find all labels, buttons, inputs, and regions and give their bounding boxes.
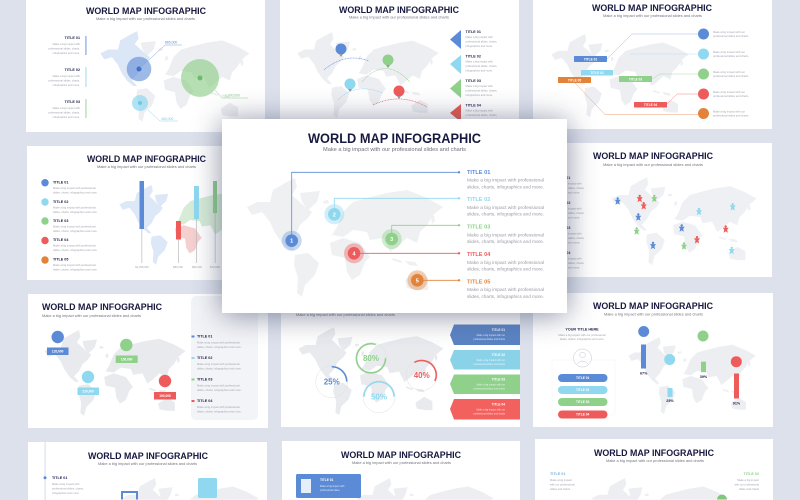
right note: TITLE 02 — [744, 472, 759, 476]
list: Make a big impact with professional — [53, 186, 96, 190]
heading: WORLD MAP INFOGRAPHIC — [339, 5, 459, 16]
list item 2: TITLE 02 — [65, 68, 80, 72]
list item 1: infographics and more. — [466, 44, 493, 48]
list item 3: Make a big impact with — [53, 106, 80, 110]
subheading: Make a big impact with our professional slides and charts — [352, 461, 451, 465]
text block 2: slides, charts, infographics and more. — [467, 212, 544, 217]
list item 1: professional slides, charts, — [466, 40, 497, 44]
world map — [247, 178, 443, 297]
tag: title 04: TITLE 04 — [644, 103, 657, 107]
data circle: green — [181, 59, 248, 98]
blue card — [296, 474, 361, 498]
list — [555, 176, 585, 270]
heading: WORLD MAP INFOGRAPHIC — [341, 450, 461, 461]
heading: WORLD MAP INFOGRAPHIC — [592, 3, 712, 14]
pills: TITLE 03 — [576, 400, 590, 404]
text block 4: Make a big impact with professional — [467, 260, 544, 265]
list item 3: infographics and more. — [53, 115, 80, 119]
ribbon: title 04: professional slides and charts — [474, 412, 506, 416]
bar: green: $70,000 — [210, 265, 220, 269]
list: TITLE 04 — [197, 399, 213, 403]
list: impact with — [568, 256, 582, 260]
list: TITLE 03 — [555, 226, 570, 230]
ribbon: title 04 — [450, 399, 520, 420]
world map — [297, 32, 439, 118]
left note: with our professional — [550, 482, 575, 486]
list item 1: Make a big impact with — [466, 35, 493, 39]
text block 1 — [467, 170, 544, 189]
text block 5: slides, charts, infographics and more. — [467, 294, 544, 299]
list: TITLE 05 — [53, 258, 68, 262]
list item 2 — [48, 67, 86, 87]
list: slides, charts, — [568, 186, 585, 190]
world map — [611, 177, 757, 265]
icon list: Make a big impact with our — [713, 110, 745, 114]
list: and more. — [568, 190, 580, 194]
tag: title 02 — [581, 70, 613, 76]
world map — [44, 330, 186, 416]
text block 5: TITLE 05 — [467, 279, 490, 285]
ribbon: title 04: Make a big impact with our — [477, 408, 505, 412]
list: slides, charts, infographics and more. — [53, 210, 98, 214]
list item 2: Make a big impact with — [53, 74, 80, 78]
marker 2 with connector: 2 — [333, 212, 336, 218]
data circle: blue: 865,000 — [165, 40, 177, 44]
heading: WORLD MAP INFOGRAPHIC — [88, 451, 208, 462]
data circle: light blue — [132, 95, 178, 121]
list: Make a big impact with professional — [197, 405, 240, 409]
list: slides, charts, — [568, 236, 585, 240]
text block 4: slides, charts, infographics and more. — [467, 266, 544, 271]
subheading: Make a big impact with our professional slides and charts — [42, 314, 141, 318]
ribbon: title 01 — [450, 324, 520, 345]
list: slides, charts, infographics and more. — [53, 248, 98, 252]
list item 2: Make a big impact with — [466, 60, 493, 64]
subheading: Make a big impact with our professional slides and charts — [96, 17, 195, 21]
subheading: Make a big impact with our professional slides and charts — [98, 462, 197, 466]
slide: bottom centre — [282, 441, 520, 500]
tag: title 01 — [574, 56, 607, 62]
slide: map pins with value tags — [28, 294, 268, 428]
list item — [52, 476, 84, 495]
text block 3: slides, charts, infographics and more. — [467, 239, 544, 244]
icon list — [698, 28, 749, 119]
list item 3: TITLE 03 — [65, 100, 80, 104]
heading: WORLD MAP INFOGRAPHIC — [42, 302, 162, 313]
marker 2 with connector — [324, 197, 460, 224]
ribbon: title 02 — [450, 350, 520, 370]
list — [41, 179, 98, 272]
icon list: professional slides and charts — [713, 94, 749, 98]
list: Make a big impact with professional — [197, 340, 240, 344]
list item 1: infographics and more. — [53, 51, 80, 55]
bar: red — [173, 221, 183, 269]
list item 1: TITLE 01 — [65, 36, 80, 40]
ring: 50%: 50% — [371, 392, 387, 402]
bar: green — [210, 181, 220, 269]
icon list: professional slides and charts — [713, 54, 749, 58]
list item 1: Make a big impact with — [53, 42, 80, 46]
blue card: TITLE 01 — [320, 478, 334, 482]
list: impact with — [568, 206, 582, 210]
marker: 39% — [698, 330, 708, 379]
list item 2: infographics and more. — [466, 68, 493, 72]
list: Make a big impact with professional — [53, 263, 96, 267]
text block 2: Make a big impact with professional — [467, 205, 544, 210]
list: impact with — [568, 232, 582, 236]
world map — [591, 478, 729, 500]
side title: Make a big impact with our professional — [558, 333, 606, 337]
tag: title 05 — [558, 77, 591, 83]
pin: red — [154, 375, 176, 400]
list: TITLE 04 — [53, 238, 69, 242]
centre slide shadow — [222, 121, 567, 315]
blue card: Make a big impact with — [320, 485, 345, 488]
slide: people markers map — [520, 143, 772, 277]
slide: pins with bars and pills — [533, 293, 773, 427]
list item 1: TITLE 01 — [466, 30, 481, 34]
ring: 80%: 80% — [363, 354, 379, 363]
heading: WORLD MAP INFOGRAPHIC — [594, 448, 714, 459]
heading: WORLD MAP INFOGRAPHIC — [593, 151, 713, 162]
text block 4: TITLE 04 — [467, 252, 491, 258]
list item 3 — [450, 79, 497, 98]
list: Make a big impact with professional — [53, 206, 96, 210]
list item 2: TITLE 02 — [466, 54, 481, 58]
bar: blue — [135, 181, 149, 269]
left note: TITLE 01 — [550, 472, 565, 476]
text block 3 — [467, 224, 544, 244]
list item 2 — [450, 54, 497, 74]
list: TITLE 01 — [197, 334, 212, 338]
pin: red: 190,000 — [159, 394, 171, 398]
world map — [101, 31, 249, 122]
marker 5 with connector: 5 — [416, 278, 419, 284]
list: slides, charts, infographics and more. — [197, 388, 242, 392]
icon list: Make a big impact with our — [713, 90, 745, 94]
list item 4: TITLE 04 — [466, 104, 482, 108]
ribbon: title 01: professional slides and charts — [474, 338, 506, 341]
text block 5 — [467, 279, 544, 299]
world map — [298, 327, 444, 415]
text block 1: slides, charts, infographics and more. — [467, 184, 544, 189]
list: slides, charts, — [568, 261, 585, 265]
thin frame — [552, 360, 615, 415]
bar: light blue: $90,000 — [192, 265, 202, 269]
slide: connector labels map — [533, 0, 772, 129]
list: slides, charts, infographics and more. — [197, 366, 242, 370]
world map — [356, 478, 494, 500]
list item 4: professional slides, charts, — [466, 113, 497, 117]
people markers — [615, 195, 736, 254]
ribbon: title 02: TITLE 02 — [492, 353, 505, 357]
side title — [558, 328, 606, 341]
left note — [550, 472, 575, 491]
list: Make a big impact with professional — [197, 362, 240, 366]
heading: WORLD MAP INFOGRAPHIC — [593, 301, 713, 312]
icon list: Make a big impact with our — [713, 50, 745, 54]
ring: 25% — [316, 366, 348, 398]
connectors — [575, 34, 698, 114]
subheading: Make a big impact with our professional slides and charts — [296, 313, 395, 317]
marker 4 with connector — [344, 243, 460, 263]
ribbon: title 03 — [450, 374, 520, 394]
list item: professional slides, charts, — [52, 486, 84, 490]
list: slides, charts, infographics and more. — [53, 268, 98, 272]
ribbon: title 03: Make a big impact with our — [477, 384, 505, 386]
list: Make a big impact with professional — [53, 224, 96, 228]
list item 2: professional slides, charts, — [48, 78, 80, 82]
marker: 39%: 39% — [700, 375, 708, 379]
marker 5 with connector — [407, 270, 460, 290]
ring: 40% — [402, 355, 442, 395]
heading: WORLD MAP INFOGRAPHIC — [308, 131, 481, 146]
data circle: green: 1,000,600 — [225, 94, 240, 98]
subheading: Make a big impact with our professional slides and charts — [604, 312, 703, 316]
blue card: professional slides — [320, 489, 340, 492]
tag: title 03 — [619, 76, 652, 82]
pin: green — [116, 339, 138, 363]
left note: Make a big impact — [550, 478, 572, 482]
slide: proportional circles map — [26, 0, 265, 132]
text block 2: TITLE 02 — [467, 197, 490, 203]
list: and more. — [568, 266, 580, 270]
icon list: Make a big impact with our — [713, 30, 745, 34]
right note: slides and charts — [739, 487, 760, 491]
pin: blue — [47, 331, 68, 355]
slide: bottom left — [28, 442, 267, 500]
ribbon: title 02: professional slides and charts — [474, 363, 506, 366]
pills — [558, 374, 608, 418]
list: and more. — [568, 216, 580, 220]
pin: light blue — [78, 371, 99, 395]
marker: 25%: 25% — [666, 399, 674, 403]
list: Make a big impact with professional — [53, 244, 96, 248]
world map — [551, 34, 689, 117]
tag: title 04 — [634, 102, 667, 108]
list: slides, charts, infographics and more. — [53, 190, 98, 194]
green marker — [717, 494, 727, 500]
list item 1 — [48, 36, 86, 55]
list item 3 — [48, 99, 86, 119]
list: Make a big impact with professional — [197, 384, 240, 388]
subheading: Make a big impact with our professional slides and charts — [97, 165, 196, 169]
text block 2 — [467, 197, 544, 217]
slide: vertical bars on map — [27, 146, 267, 280]
marker 1 with connector: 1 — [290, 239, 293, 245]
ring: 80% — [356, 343, 386, 374]
list item 3: professional slides, charts, — [48, 110, 80, 114]
list: impact with — [568, 182, 582, 186]
list: TITLE 02 — [555, 201, 570, 205]
list: and more. — [568, 240, 580, 244]
tag: title 02: TITLE 02 — [590, 71, 604, 75]
pills: TITLE 04 — [576, 413, 590, 417]
data circle: light blue: 465,000 — [161, 117, 173, 121]
subheading: Make a big impact with our professional slides and charts — [606, 459, 704, 463]
heading: WORLD MAP INFOGRAPHIC — [86, 6, 206, 17]
list: slides, charts, — [568, 211, 585, 215]
list item: TITLE 01 — [52, 476, 67, 480]
card: light blue — [198, 478, 217, 498]
bar: light blue — [192, 186, 202, 269]
list — [192, 334, 242, 414]
world map — [121, 478, 259, 500]
list item 3: professional slides, charts, — [466, 88, 497, 92]
list item: infographics and more. — [52, 491, 80, 495]
list: TITLE 01 — [555, 176, 570, 180]
list: slides, charts, infographics and more. — [197, 345, 242, 349]
text block 5: Make a big impact with professional — [467, 287, 544, 292]
side panel — [191, 296, 258, 420]
text block 1: TITLE 01 — [467, 170, 490, 176]
list item: Make a big impact with — [52, 482, 80, 486]
marker 1 with connector — [282, 171, 460, 251]
subheading: Make a big impact with our professional slides and charts — [349, 16, 449, 20]
icon list: Make a big impact with our — [713, 70, 745, 74]
pin: blue: 120,000 — [52, 350, 64, 354]
list: TITLE 01 — [53, 180, 68, 184]
data circle: blue — [127, 40, 182, 81]
list item 4 — [450, 104, 497, 122]
list: TITLE 04 — [555, 251, 571, 255]
text block 1: Make a big impact with professional — [467, 178, 544, 183]
bar: red: $80,000 — [173, 265, 183, 269]
ribbon: title 03: professional slides and charts — [474, 388, 506, 390]
icon list: professional slides and charts — [713, 74, 749, 78]
tag: title 03: TITLE 03 — [629, 78, 642, 82]
marker: 25% — [664, 354, 675, 403]
slide: bottom right — [535, 439, 773, 500]
ribbon: title 01: TITLE 01 — [492, 328, 505, 332]
list item 4: Make a big impact with — [466, 108, 493, 112]
subheading: Make a big impact with our professional slides and charts — [603, 163, 703, 167]
ring: 50% — [363, 381, 395, 413]
side title: YOUR TITLE HERE — [565, 328, 599, 332]
world map — [628, 337, 756, 414]
ribbon: title 01: Make a big impact with our — [477, 334, 505, 337]
icon: person in ring — [574, 349, 592, 367]
list: TITLE 02 — [53, 200, 68, 204]
marker: 67%: 67% — [640, 372, 648, 376]
ring: 25%: 25% — [324, 378, 340, 386]
pin: green: 150,000 — [121, 358, 133, 362]
slide: percentage rings map — [281, 296, 520, 427]
list item 1 — [450, 30, 497, 49]
list: TITLE 03 — [197, 378, 212, 382]
tag: title 01: TITLE 01 — [584, 58, 597, 62]
subheading: Make a big impact with our professional slides and charts — [323, 147, 466, 153]
ring: 40%: 40% — [414, 371, 430, 380]
list item 2: infographics and more. — [53, 83, 80, 87]
list item 3: TITLE 03 — [466, 79, 481, 83]
bar: blue: $1,250,000 — [135, 265, 149, 269]
list item 1: professional slides, charts, — [48, 46, 80, 50]
side title: slides, charts, infographics and more. — [560, 337, 605, 341]
list: TITLE 02 — [197, 356, 212, 360]
text block 4 — [467, 252, 544, 271]
icon list: professional slides and charts — [713, 34, 749, 38]
right note — [734, 472, 760, 491]
marker 3 with connector — [382, 224, 460, 249]
marker 3 with connector: 3 — [390, 237, 393, 243]
marker: 91%: 91% — [733, 402, 741, 406]
list: slides, charts, infographics and more. — [53, 229, 98, 233]
ribbon: title 04: TITLE 04 — [492, 402, 505, 406]
right note: Make a big impact — [737, 478, 759, 482]
pills: TITLE 01 — [576, 376, 590, 380]
card: blue — [122, 492, 137, 500]
tag: title 05: TITLE 05 — [568, 78, 581, 82]
heading: WORLD MAP INFOGRAPHIC — [87, 154, 206, 165]
list: TITLE 03 — [53, 219, 68, 223]
pills: TITLE 02 — [576, 388, 590, 392]
slide: pins and arcs map — [280, 0, 519, 122]
subheading: Make a big impact with our professional slides and charts — [603, 14, 702, 18]
pin: light blue: 220,000 — [82, 390, 94, 394]
coloured world map — [119, 185, 251, 265]
list item 3: Make a big impact with — [466, 84, 493, 88]
left note: slides and charts — [550, 487, 571, 491]
dashed arcs — [324, 58, 427, 107]
ribbon: title 02: Make a big impact with our — [477, 359, 505, 362]
marker: 91% — [731, 356, 742, 406]
text block 3: TITLE 03 — [467, 224, 490, 230]
list item 2: professional slides, charts, — [466, 64, 497, 68]
text block 3: Make a big impact with professional — [467, 232, 544, 237]
list item 3: infographics and more. — [466, 93, 493, 97]
icon list: professional slides and charts — [713, 114, 749, 118]
centre slide — [222, 119, 567, 313]
right note: with our professional — [734, 482, 759, 486]
ribbon: title 03: TITLE 03 — [492, 378, 505, 382]
marker 4 with connector: 4 — [352, 251, 356, 257]
list: slides, charts, infographics and more. — [197, 410, 242, 414]
timeline — [44, 442, 46, 500]
marker: 67% — [638, 326, 649, 376]
pins — [336, 44, 404, 99]
